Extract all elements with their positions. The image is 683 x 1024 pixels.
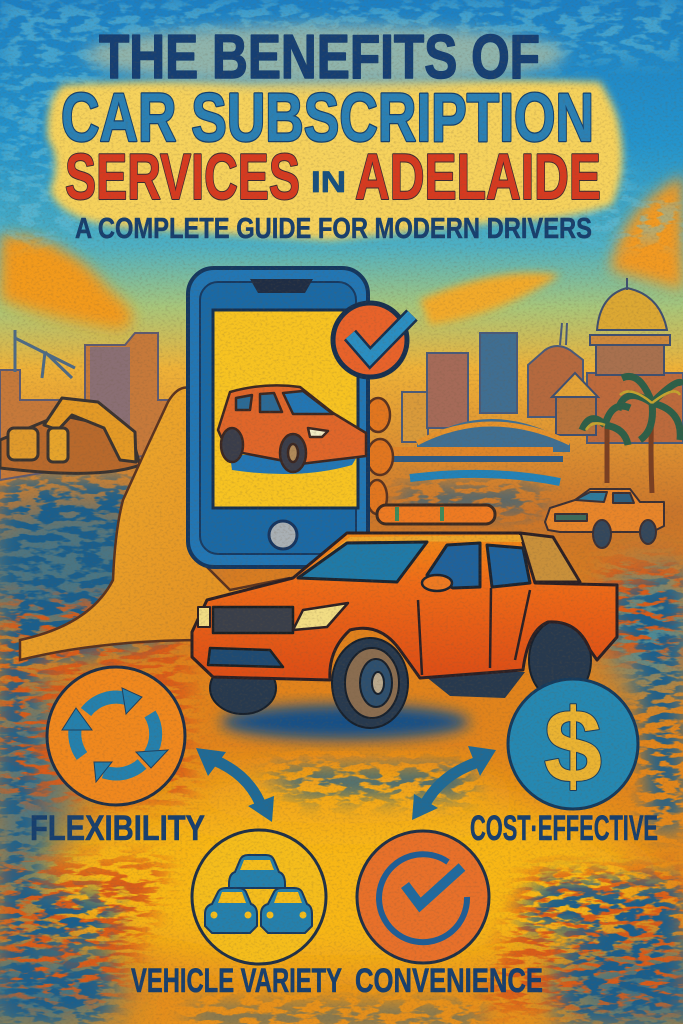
roof light bar — [377, 505, 495, 524]
roof highlight — [300, 535, 522, 575]
truck headlights — [293, 603, 348, 630]
arrow: cost to convenience — [412, 746, 496, 820]
icon: cost-effective dollar — [508, 679, 638, 809]
truck rear wheel — [529, 620, 591, 700]
label: flexibility: FLEXIBILITY — [30, 809, 205, 848]
arrow: flexibility to variety — [196, 748, 274, 822]
under-body shadow — [420, 672, 525, 698]
background: orange-red brush mottling — [0, 560, 683, 1010]
label: convenience: CONVENIENCE — [355, 962, 543, 1000]
title: SERVICES — [65, 140, 300, 213]
truck front wheel — [332, 638, 408, 728]
car on phone screen — [218, 385, 366, 474]
icon: check badge — [333, 303, 412, 377]
small background truck — [545, 489, 664, 548]
palm trees — [582, 376, 683, 493]
truck windshield — [298, 542, 427, 582]
title: THE BENEFITS OF — [99, 23, 540, 92]
title: ADELAIDE — [355, 140, 601, 213]
truck ground shadow — [220, 704, 470, 740]
right skyline — [402, 323, 683, 443]
front-left wheel — [210, 662, 276, 714]
truck door lines — [418, 588, 530, 675]
capitol dome building — [552, 278, 670, 435]
label: vehicle variety: VEHICLE VARIETY — [131, 962, 342, 1000]
main orange pickup truck — [192, 505, 617, 728]
icon: vehicle variety cars — [192, 830, 326, 964]
icon: flexibility circular arrows — [47, 667, 185, 805]
fingers behind phone — [366, 398, 393, 514]
phone screen — [213, 310, 358, 508]
bridge — [393, 419, 570, 482]
phone notch — [250, 279, 313, 293]
truck body — [192, 533, 617, 680]
rear roll rack — [520, 533, 580, 582]
icon: convenience check — [357, 831, 489, 963]
title — [61, 23, 601, 213]
background: sky brush streaks — [0, 0, 683, 240]
title: IN — [311, 166, 346, 199]
excavator — [0, 398, 140, 473]
icon: cost-effective dollar: $ — [544, 688, 602, 805]
truck grille — [213, 607, 293, 633]
hand holding phone — [20, 388, 393, 660]
truck lower intake — [208, 648, 283, 667]
palm and thumb — [20, 388, 290, 660]
title glow: yellow panel behind heading — [47, 79, 623, 240]
phone — [188, 268, 368, 567]
truck side windows — [427, 543, 530, 588]
phone home button — [269, 521, 297, 549]
title halo behind first line — [85, 25, 565, 85]
left skyline — [0, 330, 178, 480]
truck mirror — [422, 575, 452, 591]
background: blue brush mottling — [0, 480, 683, 1024]
